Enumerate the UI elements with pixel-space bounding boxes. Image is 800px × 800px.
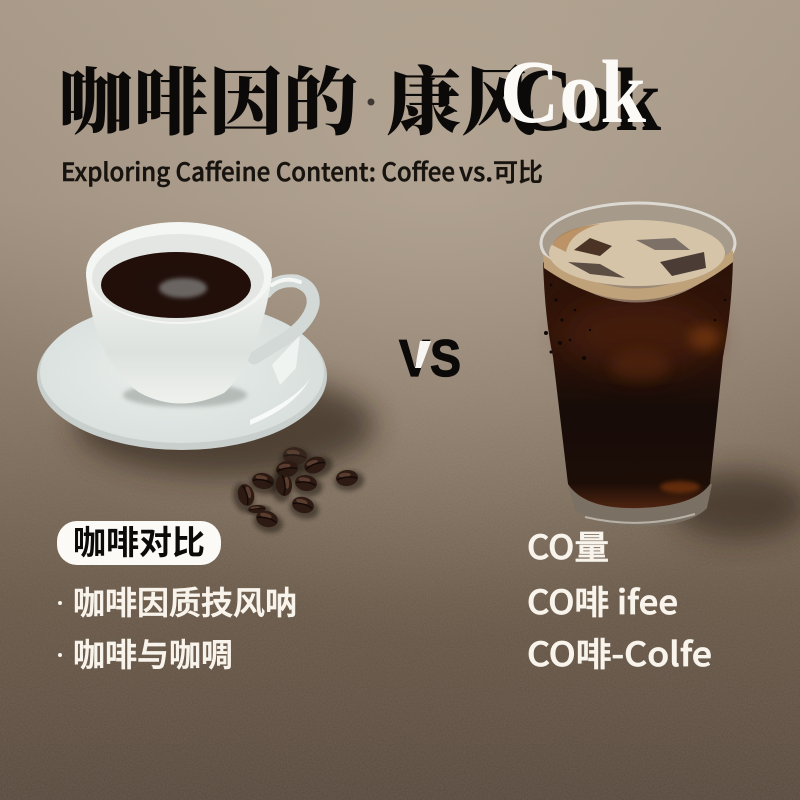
title: Cok [500,43,646,142]
coffee surface [101,252,251,318]
label 3: CO啡-Colfe [527,628,712,676]
cup rim [86,222,272,324]
photo: coffee cup on saucer [37,222,375,477]
cup handle [254,280,313,358]
subtitle: 可比 [493,153,543,189]
foam surface [549,220,725,286]
saucer [37,301,327,450]
bullet 2: 咖啡与咖啁 [73,630,233,676]
condensation drops [544,284,726,360]
glass base [568,484,712,526]
subtitle: Exploring Caffeine Content: Coffee [61,153,455,189]
panel: cola comparison list [527,521,712,676]
foam band [543,250,733,300]
bullet 1: 咖啡因质技风呐 [73,578,297,624]
ice cubes [568,238,706,278]
photo: iced cola glass [541,203,800,539]
glass rim [541,203,735,283]
glass liquid [543,258,733,508]
subtitle: vs. [459,153,493,189]
title: 康风 [386,44,536,150]
label 2: CO啡 ifee [527,576,678,624]
label 1: CO量 [527,521,609,569]
panel: coffee comparison list [57,516,297,676]
coffee beans [230,446,365,536]
title: 咖啡因的 [59,44,358,150]
title: Cok [513,51,661,150]
cup body [86,275,272,404]
VS label: VS [399,330,461,388]
pill heading: 咖啡对比 [73,516,205,564]
title [59,43,661,150]
